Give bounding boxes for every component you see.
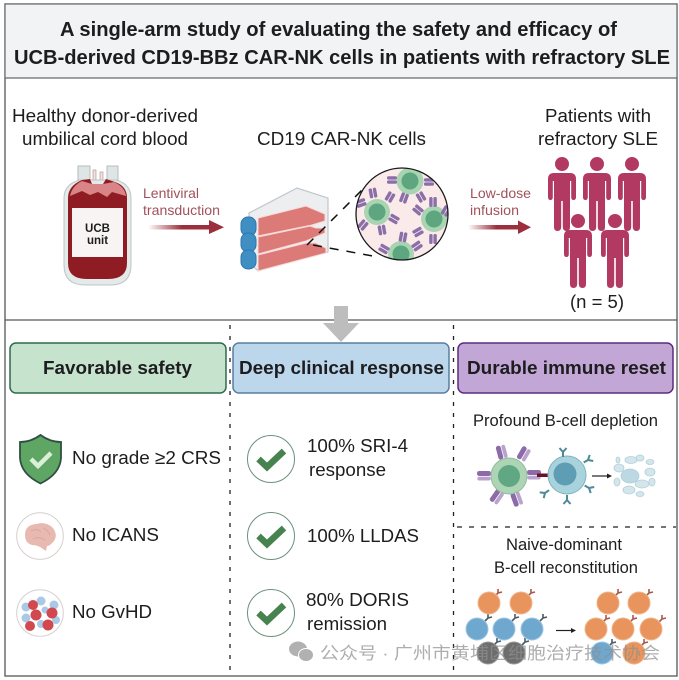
text: CAR-NK heading: CD19 CAR-NK cells bbox=[257, 129, 426, 150]
panel: deep clinical response bbox=[233, 343, 449, 636]
text: no CRS: No grade ≥2 CRS bbox=[72, 448, 221, 469]
arrow: lentiviral transduction: Lentiviral bbox=[143, 185, 199, 201]
icon: five patients bbox=[548, 157, 646, 288]
dashed divider bbox=[457, 526, 676, 528]
icon: brain bbox=[17, 513, 63, 559]
icon: check 3 bbox=[248, 590, 294, 636]
column dividers bbox=[230, 325, 454, 676]
text: SRI-4 bbox=[307, 436, 408, 481]
text: donor source bbox=[12, 106, 198, 150]
panel: favorable safety bbox=[10, 343, 226, 636]
text: patient count: (n = 5) bbox=[570, 292, 624, 313]
title banner: A single-arm study of evaluating the safety and efficacy of bbox=[60, 19, 617, 41]
text: SRI-4: 100% SRI-4 bbox=[307, 436, 408, 457]
heading: durable immune reset: Durable immune reset bbox=[467, 358, 667, 379]
text: DORIS: 80% DORIS bbox=[306, 590, 409, 611]
text: LLDAS: 100% LLDAS bbox=[307, 526, 419, 547]
arrow: reconstitution bbox=[556, 628, 576, 633]
arrow: lentiviral transduction: transduction bbox=[143, 202, 220, 218]
arrow: lentiviral transduction bbox=[143, 185, 224, 234]
text: no ICANS: No ICANS bbox=[72, 525, 159, 546]
arrow: low-dose infusion: Low-dose bbox=[470, 185, 531, 201]
icon: chat logo bbox=[289, 642, 314, 662]
icon: check 2 bbox=[248, 512, 294, 560]
arrow: grey down arrow bbox=[323, 306, 359, 342]
text: donor source: Healthy donor-derived bbox=[12, 106, 198, 127]
diagram: B-cell reconstitution after bbox=[585, 589, 666, 664]
heading: favorable safety: Favorable safety bbox=[43, 358, 192, 379]
text: patients heading bbox=[538, 106, 658, 150]
icon: UCB blood bag: unit bbox=[87, 235, 108, 247]
watermark: 公众号 · 广州市黄埔区细胞治疗技术协会 bbox=[320, 644, 660, 663]
text: reconstitution: Naive-dominant bbox=[506, 535, 622, 554]
panel: durable immune reset bbox=[457, 343, 676, 664]
text: SRI-4: response bbox=[309, 460, 386, 481]
section divider bbox=[5, 319, 677, 321]
heading: favorable safety bbox=[10, 343, 226, 393]
icon: GvHD cells bbox=[17, 590, 63, 636]
diagram: B-cell reconstitution before bbox=[466, 589, 547, 664]
text: DORIS: remission bbox=[307, 614, 387, 635]
text: patients heading: refractory SLE bbox=[538, 129, 658, 150]
text: reconstitution bbox=[494, 535, 638, 577]
heading: durable immune reset bbox=[458, 343, 673, 393]
text: reconstitution: B-cell reconstitution bbox=[494, 558, 638, 577]
heading: deep clinical response: Deep clinical response bbox=[239, 358, 444, 379]
icon: CAR-NK cell magnified view bbox=[355, 168, 452, 267]
icon: check 1 bbox=[248, 436, 294, 482]
title banner: UCB-derived CD19-BBz CAR-NK cells in patients with refractory SLE bbox=[14, 47, 670, 69]
icon: shield bbox=[20, 435, 61, 484]
diagram: B-cell depletion bbox=[477, 444, 655, 507]
heading: deep clinical response bbox=[233, 343, 449, 393]
text: depletion: Profound B-cell depletion bbox=[473, 411, 658, 430]
arrow: low-dose infusion bbox=[468, 185, 531, 234]
icon: UCB blood bag: UCB bbox=[85, 223, 110, 235]
icon: UCB blood bag bbox=[64, 166, 131, 285]
title banner bbox=[5, 5, 677, 78]
text: DORIS bbox=[306, 590, 409, 635]
text: patients heading: Patients with bbox=[545, 106, 651, 127]
text: no GvHD: No GvHD bbox=[72, 602, 152, 623]
zoom lines bbox=[307, 190, 378, 257]
text: donor source: umbilical cord blood bbox=[22, 129, 188, 150]
icon: stacked culture flasks bbox=[241, 188, 328, 271]
arrow: low-dose infusion: infusion bbox=[470, 202, 519, 218]
